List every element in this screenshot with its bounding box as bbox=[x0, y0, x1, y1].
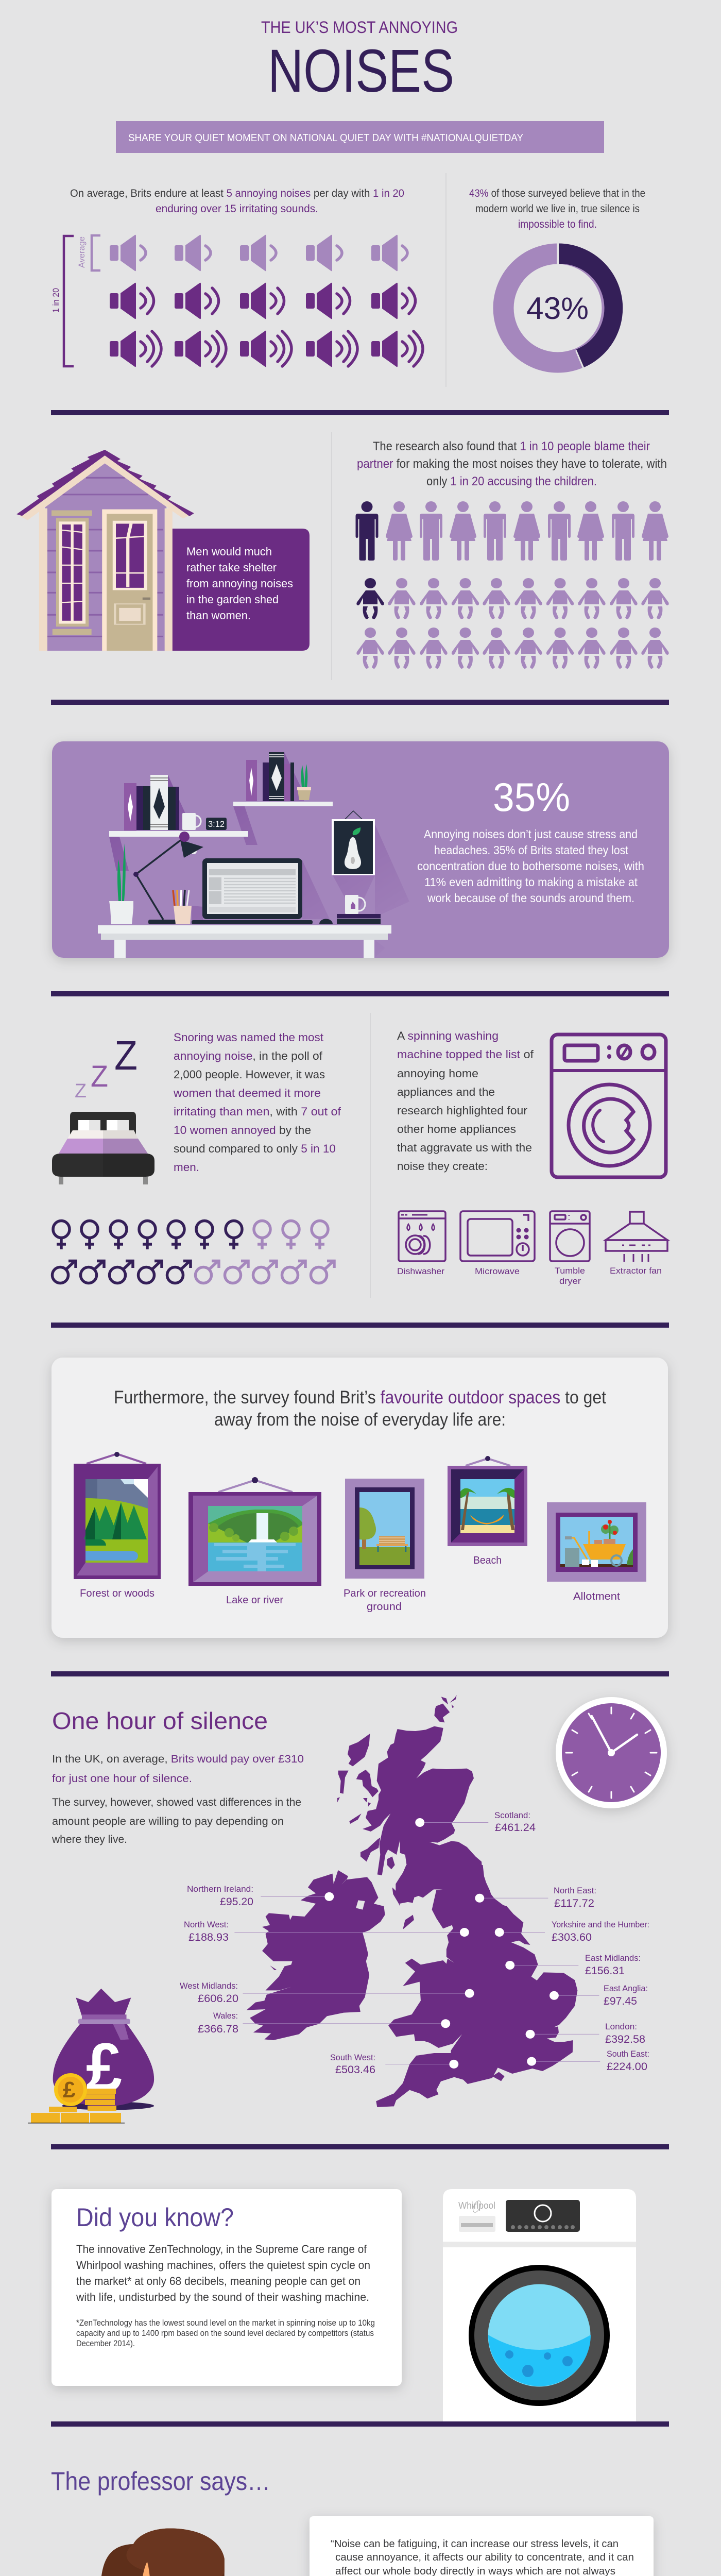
callout: men in shed bbox=[170, 529, 310, 651]
icon: washing machine bbox=[552, 1035, 666, 1177]
icons: male symbols 5 of 10 bbox=[53, 1261, 334, 1283]
heading: outdoor spaces: away from the noise of everyday life are: bbox=[214, 1410, 506, 1430]
laptop bbox=[192, 858, 313, 924]
icon: money bag with coins bbox=[28, 1989, 154, 2124]
heading: did you know: Did you know? bbox=[76, 2203, 234, 2232]
labels: appliances: Extractor fan bbox=[610, 1266, 662, 1276]
icon: money bag with coins: £ bbox=[63, 2077, 76, 2103]
text: ZenTechnology: the market* at only 68 decibels, meaning people can get on bbox=[76, 2275, 360, 2287]
icons: female symbols 7 of 10 bbox=[53, 1221, 328, 1249]
South East bbox=[607, 2049, 649, 2073]
heading: one hour of silence: One hour of silence bbox=[52, 1707, 268, 1734]
chart: donut 43%: 43% bbox=[526, 291, 589, 326]
text: snoring: 2,000 people. However, it was bbox=[174, 1068, 325, 1081]
text: 43 percent bbox=[469, 188, 645, 230]
digital clock bbox=[206, 818, 227, 830]
Northern Ireland bbox=[187, 1884, 253, 1908]
text: Brits would pay over 310: The survey, however, showed vast differences in the bbox=[52, 1797, 301, 1808]
label: beach: Beach bbox=[473, 1555, 502, 1566]
East Midlands: £156.31 bbox=[585, 1965, 625, 1977]
South West: £503.46 bbox=[335, 2064, 375, 2076]
control panel bbox=[506, 2200, 580, 2232]
text: snoring: Snoring was named the most bbox=[174, 1031, 323, 1044]
text: quote: “Noise can be fatiguing, it can increase our stress levels, it can bbox=[331, 2538, 619, 2550]
text: 1 in 10 blame partner: The research also found that 1 in 10 people blame their bbox=[373, 439, 650, 453]
South West: South West: bbox=[330, 2053, 375, 2062]
text: spinning washing machine: machine topped the list of bbox=[397, 1048, 534, 1061]
books upper shelf bbox=[246, 752, 294, 801]
London: £392.58 bbox=[605, 2033, 645, 2045]
text: footnote bbox=[76, 2318, 375, 2348]
plant small bbox=[297, 764, 311, 800]
East Anglia bbox=[604, 1984, 648, 2007]
text: 1 in 10 blame partner: partner for making the most noises they have to tolerate, with bbox=[357, 457, 667, 471]
label: allotment: Allotment bbox=[573, 1591, 620, 1602]
label: forest or woods: Forest or woods bbox=[80, 1588, 154, 1599]
text: footnote: capacity and up to 1400 rpm based on the sound level declared by competitors (status bbox=[76, 2328, 374, 2338]
pencils in cup bbox=[173, 890, 192, 924]
Scotland: Scotland: bbox=[494, 1810, 530, 1820]
text: 5 annoying noises bbox=[70, 188, 404, 215]
region dots bbox=[324, 1818, 559, 2069]
text: snoring: sound compared to only 5 in 10 bbox=[174, 1142, 336, 1155]
Yorkshire and the Humber: £303.60 bbox=[552, 1931, 592, 1943]
logo: Whirlpool: Whirlpool bbox=[458, 2200, 495, 2211]
text: snoring: annoying noise, in the poll of bbox=[174, 1049, 323, 1062]
callout: men in shed: rather take shelter bbox=[186, 561, 277, 574]
text: spinning washing machine: noise they create: bbox=[397, 1160, 488, 1173]
text: snoring: women that deemed it more bbox=[173, 1087, 321, 1099]
heading: outdoor spaces: Furthermore, the survey found Brit’s favourite outdoor spaces to get bbox=[114, 1387, 606, 1408]
North West: £188.93 bbox=[188, 1931, 229, 1943]
text: stress and headaches bbox=[417, 827, 644, 905]
picture: allotment bbox=[547, 1502, 646, 1582]
picture: park bbox=[345, 1479, 424, 1579]
East Anglia: East Anglia: bbox=[604, 1984, 648, 1993]
West Midlands: £606.20 bbox=[198, 1993, 238, 2005]
callout: men in shed: from annoying noises bbox=[186, 577, 293, 590]
icon: bed bbox=[52, 1112, 154, 1184]
text: Brits would pay over 310: for just one hour of silence. bbox=[52, 1773, 192, 1785]
picture: beach bbox=[448, 1456, 527, 1546]
London bbox=[605, 2022, 645, 2045]
drawer bbox=[459, 2216, 495, 2232]
leader lines bbox=[234, 1823, 600, 2064]
Scotland bbox=[494, 1810, 536, 1834]
text: footnote: December 2014). bbox=[76, 2338, 135, 2348]
text: spinning washing machine: annoying home bbox=[397, 1067, 478, 1080]
Northern Ireland: Northern Ireland: bbox=[187, 1884, 253, 1894]
mug bbox=[182, 813, 201, 830]
text: Brits would pay over 310: In the UK, on average, Brits would pay over £310 bbox=[52, 1753, 304, 1765]
icon: dishwasher bbox=[399, 1211, 445, 1261]
panel: 35 percent concentration bbox=[52, 741, 669, 958]
label: park or recreation ground: Park or recreation bbox=[344, 1588, 426, 1599]
North West: North West: bbox=[184, 1920, 229, 1929]
Yorkshire and the Humber: Yorkshire and the Humber: bbox=[552, 1920, 649, 1929]
mouse bbox=[319, 919, 333, 924]
books lower shelf bbox=[124, 775, 179, 831]
picture: forest or woods bbox=[74, 1452, 161, 1579]
panel: who people blame bbox=[355, 439, 669, 669]
mug on books bbox=[337, 895, 381, 924]
icon: zzz: Z bbox=[75, 1080, 87, 1102]
bracket: average bbox=[77, 235, 100, 270]
banner: national quiet day: SHARE YOUR QUIET MOMENT ON NATIONAL QUIET DAY WITH #NATIONALQUIETDAY bbox=[128, 132, 523, 144]
icons: speakers loudest row bbox=[110, 331, 423, 367]
text: stress and headaches: headaches. 35% of Brits stated they lost bbox=[434, 843, 629, 857]
text: snoring bbox=[173, 1031, 341, 1174]
Wales bbox=[198, 2011, 238, 2035]
drum door bbox=[469, 2265, 610, 2406]
panel: did you know bbox=[52, 2189, 402, 2386]
text: spinning washing machine: research highlighted four bbox=[397, 1104, 527, 1117]
icons: speakers average row bbox=[110, 235, 407, 271]
icon: clock bbox=[556, 1697, 667, 1808]
label: park or recreation ground bbox=[344, 1588, 426, 1613]
North East bbox=[554, 1886, 596, 1909]
Wales: Wales: bbox=[213, 2011, 238, 2021]
text: stress and headaches: Annoying noises don’t just cause stress and bbox=[424, 827, 638, 841]
map: UK and Ireland bbox=[234, 1695, 600, 2107]
text: Brits would pay over 310: where they live. bbox=[52, 1834, 127, 1845]
illustration: shed bbox=[16, 450, 194, 651]
text: footnote: *ZenTechnology has the lowest sound level on the market in spinning noise up to 10kg bbox=[76, 2318, 375, 2328]
picture of a pear bbox=[332, 811, 375, 875]
panel: silence impossible to find bbox=[469, 188, 645, 369]
text: spinning washing machine: appliances and the bbox=[397, 1086, 495, 1098]
label: lake or river: Lake or river bbox=[226, 1595, 283, 1606]
London: London: bbox=[605, 2022, 637, 2031]
text: quote bbox=[331, 2538, 634, 2576]
icons: children row one bbox=[356, 578, 669, 619]
labels: appliances: Tumble bbox=[555, 1266, 585, 1276]
Northern Ireland: £95.20 bbox=[220, 1896, 253, 1908]
digital clock: 3:12 bbox=[208, 819, 225, 829]
bracket: 1 in 20 bbox=[51, 236, 74, 366]
illustration: Whirlpool washing machine bbox=[443, 2189, 636, 2421]
plant in white pot bbox=[109, 843, 133, 924]
panel: one hour of silence bbox=[28, 1695, 667, 2124]
icons: adults row bbox=[355, 501, 668, 561]
text: ZenTechnology: with life, undisturbed by the sound of their washing machine. bbox=[76, 2291, 369, 2303]
callout: quote bubble bbox=[252, 2516, 654, 2576]
text: 1 in 10 blame partner bbox=[357, 439, 667, 488]
stat: 35%: 35% bbox=[493, 774, 570, 820]
icon: money bag with coins: £ bbox=[86, 2029, 122, 2106]
text: ZenTechnology bbox=[76, 2243, 370, 2303]
label: park or recreation ground: ground bbox=[367, 1601, 402, 1613]
text: 43 percent: impossible to find. bbox=[518, 218, 597, 230]
East Anglia: £97.45 bbox=[604, 1995, 637, 2007]
West Midlands bbox=[180, 1981, 238, 2005]
heading: the professor says: The professor says… bbox=[51, 2467, 270, 2496]
text: spinning washing machine: that aggravate us with the bbox=[397, 1141, 532, 1154]
North East: £117.72 bbox=[554, 1897, 594, 1909]
shelf upper bbox=[233, 802, 333, 806]
text: 43 percent: 43% of those surveyed believe that in the bbox=[469, 188, 645, 199]
text: 1 in 10 blame partner: only 1 in 20 accusing the children. bbox=[426, 474, 597, 488]
labels: appliances: Dishwasher bbox=[397, 1266, 444, 1276]
bracket: 1 in 20: 1 in 20 bbox=[51, 288, 61, 313]
callout: men in shed: than women. bbox=[186, 609, 251, 622]
icon: microwave bbox=[460, 1211, 535, 1261]
shelf lower bbox=[109, 831, 248, 837]
text: stress and headaches: 11% even admitting to making a mistake at bbox=[424, 875, 638, 889]
text: 43 percent: modern world we live in, true silence is bbox=[475, 203, 640, 215]
text: stress and headaches: concentration due to bothersome noises, with bbox=[417, 859, 644, 873]
South East: South East: bbox=[607, 2049, 649, 2059]
desk bbox=[98, 925, 391, 958]
heading: outdoor spaces bbox=[114, 1387, 606, 1430]
banner: national quiet day bbox=[116, 121, 604, 153]
text: spinning washing machine bbox=[397, 1029, 534, 1173]
text: ZenTechnology: Whirlpool washing machines, offers the quietest spin cycle on bbox=[76, 2259, 370, 2272]
South East: £224.00 bbox=[607, 2061, 647, 2073]
text: snoring: men. bbox=[174, 1161, 199, 1174]
icon: zzz bbox=[75, 1032, 138, 1102]
labels: appliances: dryer bbox=[559, 1276, 581, 1286]
Scotland: £461.24 bbox=[495, 1822, 536, 1834]
panel: average annoying noises bbox=[51, 188, 423, 367]
illustration: professor bbox=[88, 2528, 253, 2576]
lamp bbox=[133, 832, 203, 924]
bracket: average: Average bbox=[77, 236, 87, 268]
text: Brits would pay over 310 bbox=[52, 1753, 304, 1845]
North West bbox=[184, 1920, 229, 1943]
illustration: desk scene bbox=[98, 752, 409, 958]
text: snoring: irritating than men , with 7 out of bbox=[174, 1105, 341, 1118]
text: stress and headaches: work because of the sounds around them. bbox=[427, 891, 634, 905]
icon: extractor fan bbox=[606, 1212, 667, 1262]
text: Brits would pay over 310: amount people are willing to pay depending on bbox=[52, 1816, 284, 1827]
Wales: £366.78 bbox=[198, 2023, 238, 2035]
icons: children row two bbox=[356, 628, 669, 669]
text: spinning washing machine: A spinning washing bbox=[397, 1029, 499, 1042]
icon: zzz: Z bbox=[114, 1032, 138, 1078]
callout: men in shed: in the garden shed bbox=[186, 593, 279, 606]
Yorkshire and the Humber bbox=[552, 1920, 649, 1943]
panel: favourite outdoor spaces bbox=[52, 1358, 668, 1638]
panel: snoring bbox=[52, 1031, 341, 1283]
picture: lake or river bbox=[188, 1477, 321, 1586]
text: spinning washing machine: other home appliances bbox=[397, 1123, 516, 1136]
panel: home appliances bbox=[397, 1029, 667, 1286]
text: 5 annoying noises: enduring over 15 irritating sounds. bbox=[156, 203, 318, 215]
text: 5 annoying noises: On average, Brits endure at least 5 annoying noises per day with 1 in 20 bbox=[70, 188, 404, 199]
text: ZenTechnology: The innovative ZenTechnology, in the Supreme Care range of bbox=[76, 2243, 367, 2256]
labels: regional amounts bbox=[180, 1810, 649, 2076]
icon: tumble dryer bbox=[550, 1211, 590, 1261]
icons: speakers louder row bbox=[110, 283, 415, 319]
callout: men in shed: Men would much bbox=[186, 545, 272, 558]
East Midlands bbox=[585, 1953, 641, 1977]
text: quote: cause annoyance, it affects our ability to concentrate, and it can bbox=[335, 2552, 634, 2563]
labels: appliances bbox=[397, 1266, 662, 1286]
text: snoring: 10 women annoyed by the bbox=[174, 1124, 311, 1137]
West Midlands: West Midlands: bbox=[180, 1981, 238, 1991]
chart: donut 43% bbox=[504, 242, 623, 369]
title: Noises: NOISES bbox=[268, 37, 454, 105]
East Midlands: East Midlands: bbox=[585, 1953, 641, 1963]
South West bbox=[330, 2053, 375, 2076]
labels: appliances: Microwave bbox=[475, 1266, 520, 1276]
icon: zzz: Z bbox=[91, 1060, 108, 1093]
subtitle: The UK's most annoying: THE UK’S MOST ANNOYING bbox=[261, 18, 458, 37]
North East: North East: bbox=[554, 1886, 596, 1895]
panel: garden shed bbox=[16, 450, 310, 651]
